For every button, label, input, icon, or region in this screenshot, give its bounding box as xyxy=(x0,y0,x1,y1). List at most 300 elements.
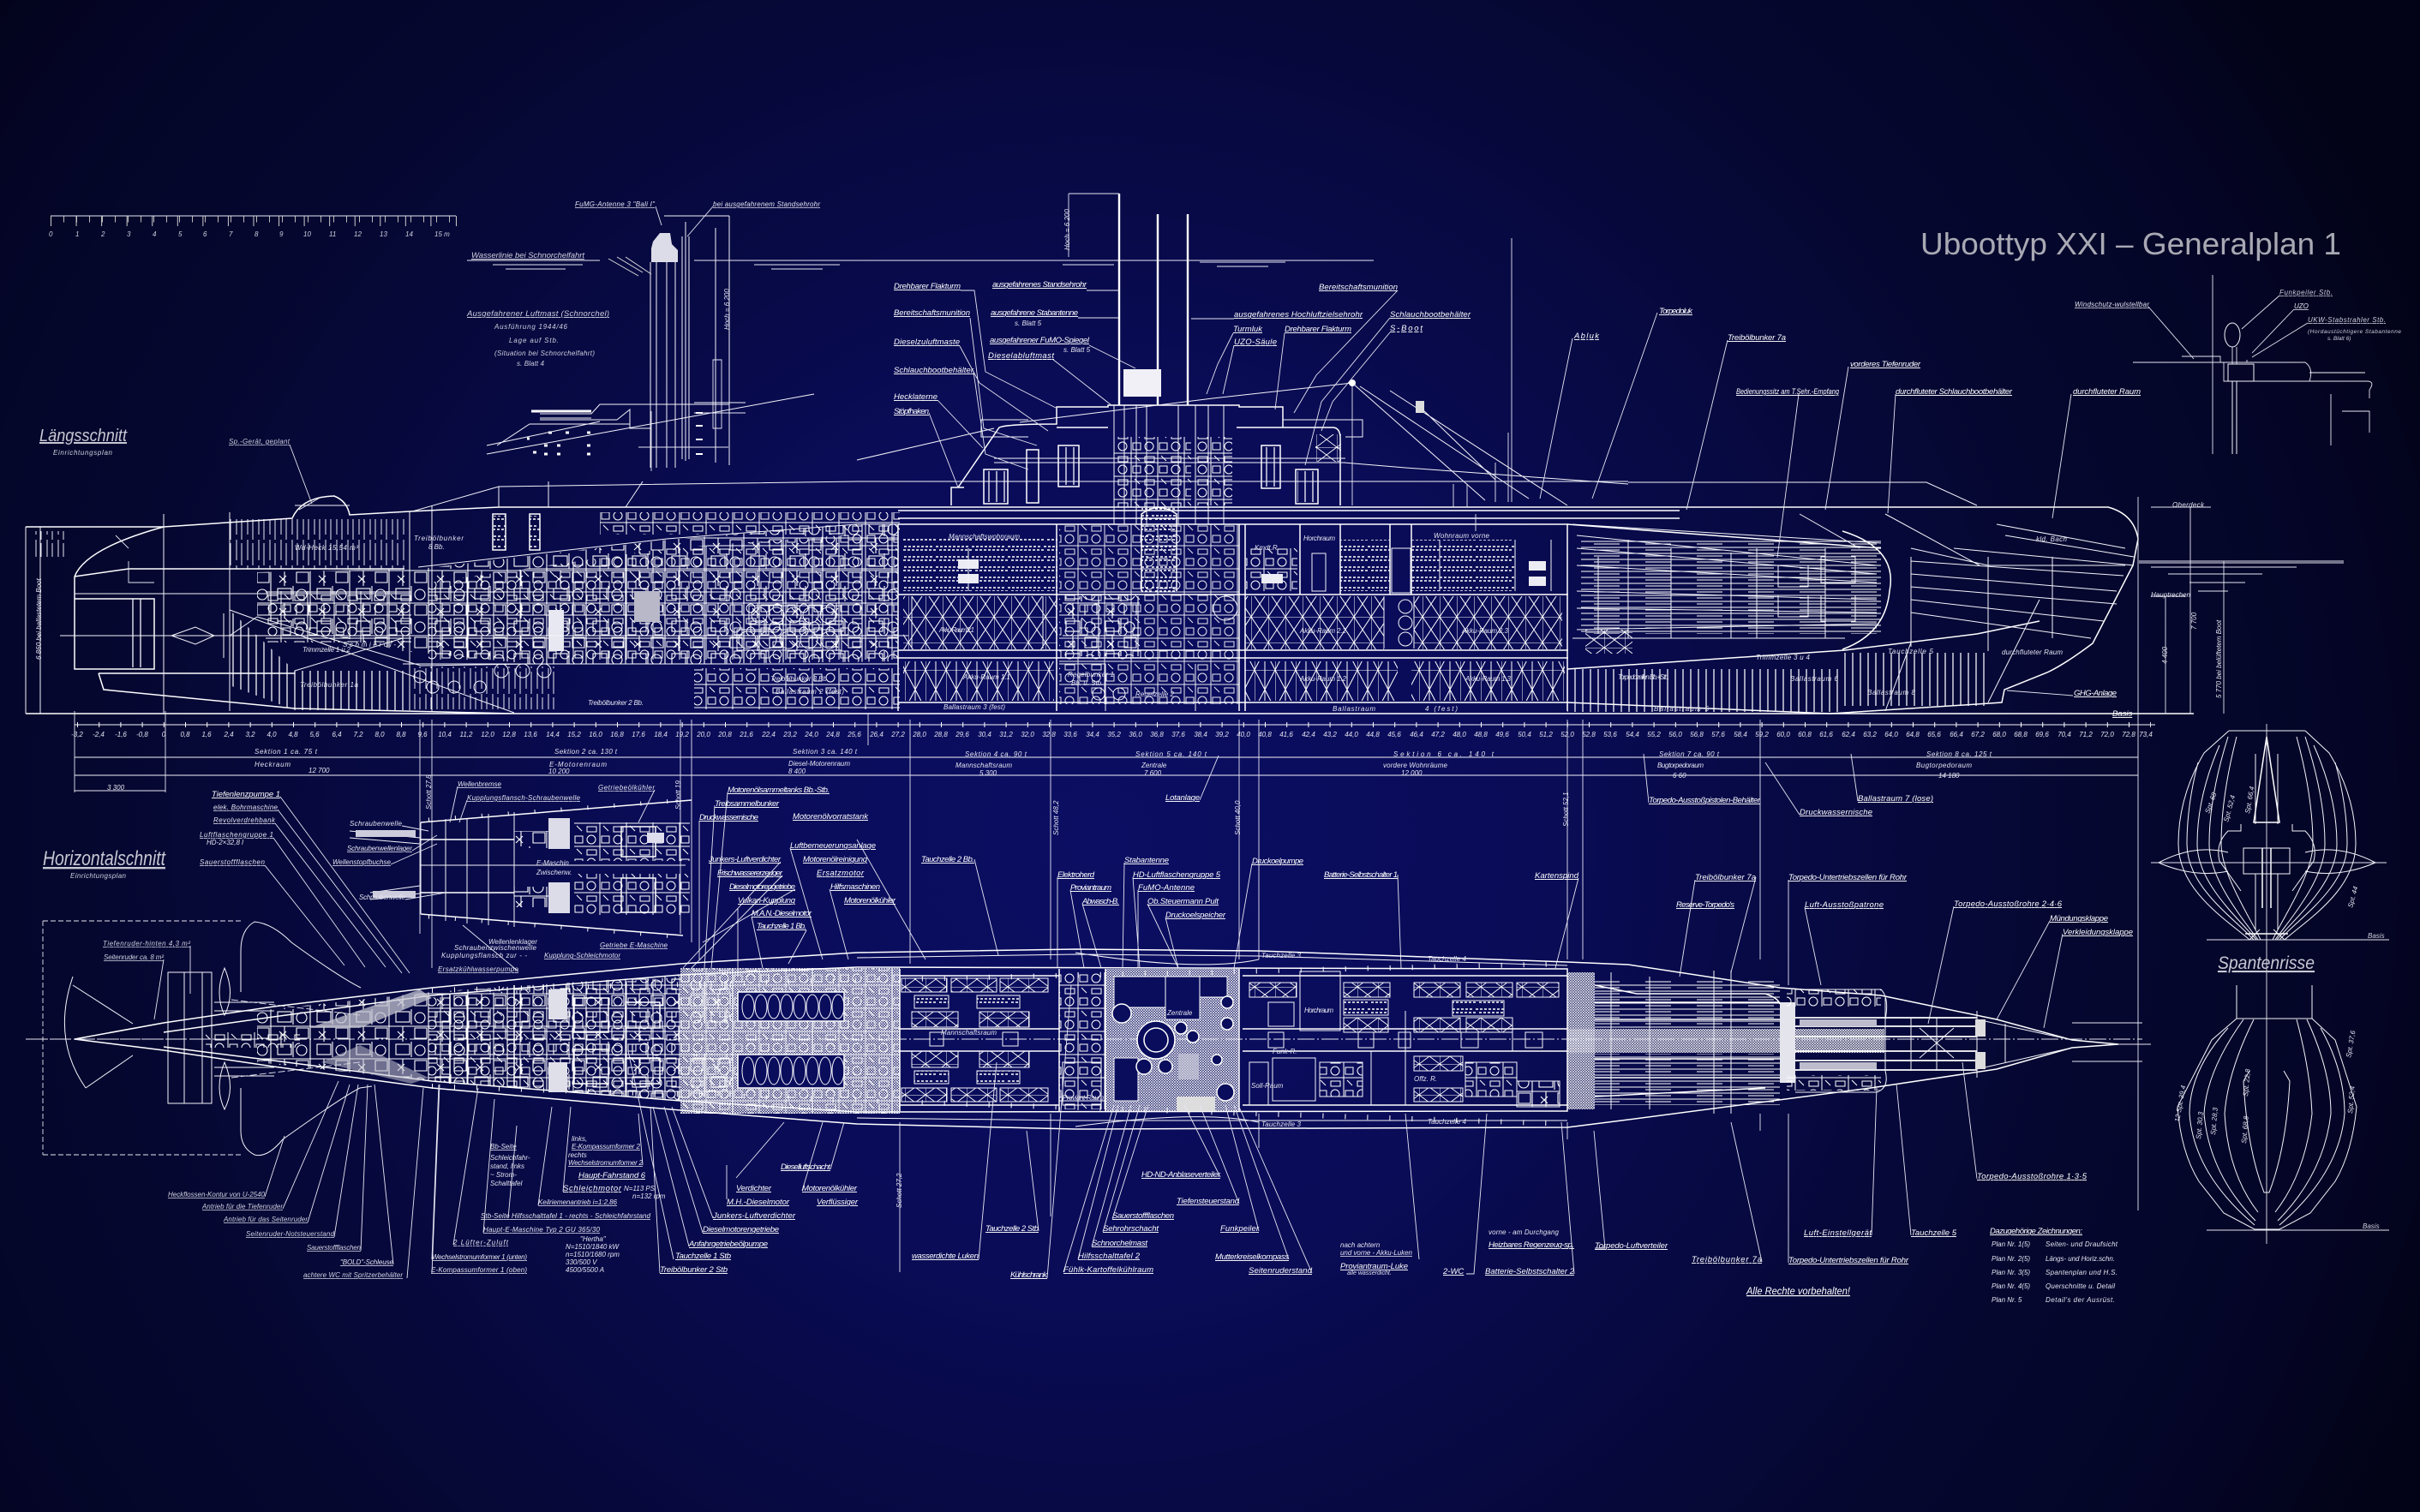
footer notes: related drawings: Plan Nr. 3(5) xyxy=(1992,1269,2030,1276)
horizontal section labels lower: N=113 PS xyxy=(624,1185,656,1192)
longitudinal leader labels: conning tower: Bereitschaftsmunition xyxy=(894,308,970,318)
torpedo room and bow: Trimmzelle 3 u 4 xyxy=(1756,654,1811,661)
horizontal section labels upper: Druckoelpumpe xyxy=(1252,857,1303,866)
room labels in longitudinal section: Regelzelle 2 xyxy=(1135,690,1175,698)
horizontal section labels lower: Schleichmotor xyxy=(563,1184,622,1193)
horizontal section labels upper: Wellenlenklager xyxy=(488,938,537,946)
footer notes: related drawings: Dazugehörige Zeichnungen: xyxy=(1990,1227,2082,1236)
horizontal section labels lower: wasserdichte Luken xyxy=(912,1252,979,1261)
frame scale and section table: 2,4 xyxy=(223,731,234,738)
frame scale and section table: 68,8 xyxy=(2014,731,2028,738)
horizontal section labels lower: Kühlschrank xyxy=(1010,1270,1048,1280)
room labels in longitudinal section: Ballastraum xyxy=(1333,705,1375,713)
frame scale and section table: 7 600 xyxy=(1144,769,1162,777)
frame scale and section table: Sektion 8 ca. 125 t xyxy=(1926,750,1992,758)
horizontal section labels lower: Bb-Seite xyxy=(490,1143,517,1150)
horizontal section labels upper: Tauchzelle 2 Bb. xyxy=(921,855,974,864)
scale bar: 15 m xyxy=(434,230,450,238)
horizontal section: hull outline xyxy=(26,949,2142,1129)
longitudinal leader labels: conning tower xyxy=(229,200,2141,696)
frame scale and section table: 44,0 xyxy=(1345,731,1358,738)
hull outline: Ballastraum 2 (fest) xyxy=(776,688,844,696)
frame scale and section table: 3 300 xyxy=(107,784,125,792)
room labels in longitudinal section: Ballastraum 3 (fest) xyxy=(943,703,1005,711)
frame scale and section table: Bugtorpedoraum xyxy=(1657,762,1704,769)
horizontal section labels upper: Sauerstoffflaschen xyxy=(200,858,266,866)
horizontal section: crew rooms: Tauchzelle 3 xyxy=(1261,952,1302,959)
frame scale and section table: 47,2 xyxy=(1431,731,1445,738)
horizontal section labels lower: Antrieb für die Tiefenruder xyxy=(201,1203,283,1210)
horizontal section labels upper: Ersatzkühlwasserpumpe xyxy=(438,965,519,973)
horizontal section labels lower: Sauerstoffflaschen xyxy=(1112,1211,1174,1221)
frame section drawing: lower xyxy=(2173,985,2389,1230)
frame scale and section table: 69,6 xyxy=(2035,731,2049,738)
frame scale and section table: 54,4 xyxy=(1626,731,1639,738)
frame scale and section table: -3,2 xyxy=(71,731,83,738)
horizontal section labels upper: Torpedo-Ausstoßrohre 2·4·6 xyxy=(1954,899,2063,909)
bow dimensions: 4 400 xyxy=(2161,646,2169,664)
frame scale and section table: 51,2 xyxy=(1539,731,1553,738)
horizontal section labels upper: Getriebe E-Maschine xyxy=(600,941,668,949)
longitudinal leader labels: conning tower: Drehbarer Flakturm xyxy=(1285,325,1351,334)
snorkel detail xyxy=(467,216,1374,471)
frame scale and section table: 72,8 xyxy=(2122,731,2135,738)
horizontal section labels lower: Luft-Einstellgerät xyxy=(1804,1228,1872,1238)
torpedo room and bow: Ballastraum 6 xyxy=(1790,675,1839,683)
room labels in longitudinal section: Mannschaftswohnraum xyxy=(949,533,1020,541)
frame scale and section table: 15,2 xyxy=(567,731,581,738)
longitudinal leader labels: conning tower: S-Boot xyxy=(1390,324,1423,333)
horizontal section: crew rooms: Proviant-Raum xyxy=(1063,1094,1104,1102)
horizontal section labels lower: rechts xyxy=(568,1151,587,1159)
torpedo room and bow: Ballastraum 8 xyxy=(1867,689,1916,696)
frame scale and section table: Schott 27,8 xyxy=(425,774,433,810)
horizontal section labels lower: Stb-Seite Hilfsschalttafel 1 - rechts - Schleichfahrstand xyxy=(481,1212,651,1220)
frame scale and section table: 32,8 xyxy=(1042,731,1056,738)
horizontal section labels upper: Tiefenruder-hinten 4,3 m² xyxy=(103,940,190,947)
frame scale and section table: Sektion 2 ca. 130 t xyxy=(554,748,618,756)
horizontal section labels lower: Heizbares Regenzeug-sp. xyxy=(1489,1240,1574,1250)
frame scale and section table: 3,2 xyxy=(245,731,255,738)
horizontal section labels upper: elek. Bohrmaschine xyxy=(213,804,279,811)
frame scale and section table: 16,8 xyxy=(610,731,624,738)
frame scale and section table: 67,2 xyxy=(1971,731,1985,738)
horizontal section labels lower: Antrieb für das Seitenruder xyxy=(223,1216,308,1223)
horizontal section labels upper: Schraubenzwischenwelle xyxy=(454,944,537,952)
frame scale and section table: 16,0 xyxy=(589,731,602,738)
hull outline: Treibölbunker 2 Bb. xyxy=(588,699,644,707)
frame scale and section table: Heckraum xyxy=(255,761,291,768)
horizontal section labels upper: HD-Luftflaschengruppe 5 xyxy=(1133,870,1221,880)
frame section drawing: upper: Spt. 68 xyxy=(2203,791,2219,815)
frame scale and section table: 42,4 xyxy=(1302,731,1315,738)
frame scale and section table: -1,6 xyxy=(115,731,127,738)
horizontal section labels lower xyxy=(168,985,2088,1280)
top-right detail view: UKW-Stabstrahler Stb. xyxy=(2308,316,2386,324)
footer notes: related drawings: Querschnitte u. Detail xyxy=(2046,1282,2115,1290)
horizontal section labels upper: E-Maschin xyxy=(536,859,569,867)
horizontal section labels lower: n=1510/1680 rpm xyxy=(566,1251,620,1258)
frame scale and section table: 40,0 xyxy=(1237,731,1250,738)
frame scale and section table: Sektion 3 ca. 140 t xyxy=(793,748,858,756)
frame section drawing: lower: Spt. 52,4 xyxy=(2346,1085,2357,1114)
top-right detail view: Funkpeiler Stb. xyxy=(2279,289,2333,296)
horizontal section labels lower: M.H.-Dieselmotor xyxy=(727,1198,790,1207)
horizontal section: crew rooms: Funk-R. xyxy=(1273,1048,1297,1055)
horizontal section labels lower: Sauerstoffflaschen xyxy=(307,1244,362,1252)
horizontal section labels upper: Seitenruder ca. 8 m² xyxy=(104,953,164,961)
frame scale and section table: 24,8 xyxy=(825,731,840,738)
horizontal section labels lower: Schleichfahr- xyxy=(490,1154,530,1162)
horizontal section labels lower: "Hertha" xyxy=(580,1235,607,1243)
frame scale and section table: -2,4 xyxy=(93,731,105,738)
horizontal section labels lower: Hilfsschalttafel 2 xyxy=(1078,1252,1141,1261)
copyright note: Alle Rechte vorbehalten! xyxy=(1746,1285,1851,1297)
frame scale and section table: 48,8 xyxy=(1474,731,1488,738)
horizontal section labels lower: E-Kompassumformer 1 (oben) xyxy=(431,1266,527,1274)
frame scale and section table: 1,6 xyxy=(201,731,212,738)
heading: Spantenrisse: Spantenrisse xyxy=(2218,953,2315,973)
scale bar: 14 xyxy=(405,230,413,238)
horizontal section: torpedo room and bow xyxy=(1567,971,2151,1114)
longitudinal leader labels: conning tower: Wasserlinie bei Schnorchelfahrt xyxy=(471,251,584,260)
frame scale and section table: 43,2 xyxy=(1323,731,1337,738)
horizontal section labels upper: Ob.Steuermann Pult xyxy=(1147,897,1219,906)
frame scale and section table: 66,4 xyxy=(1950,731,1963,738)
horizontal section labels upper: Tiefenlenzpumpe 1 xyxy=(212,790,280,799)
horizontal section labels lower: Sehrohrschacht xyxy=(1103,1224,1159,1234)
scale bar: 4 xyxy=(153,230,157,238)
frame scale and section table: 27,2 xyxy=(890,731,905,738)
hull outline: Wd-Heck 15,54 m³ xyxy=(295,544,358,552)
frame section drawing: lower: Spt. 30,3 xyxy=(2195,1111,2205,1139)
footer notes: related drawings: Plan Nr. 4(5) xyxy=(1992,1282,2030,1290)
scale bar: 11 xyxy=(329,230,336,238)
frame scale and section table: 28,0 xyxy=(912,731,926,738)
horizontal section labels lower: Haupt-Fahrstand 6 xyxy=(578,1171,646,1180)
horizontal section labels upper: Zwischenw. xyxy=(536,869,572,876)
frame scale and section table: 38,4 xyxy=(1194,731,1207,738)
longitudinal leader labels: conning tower: ausgefahrener FuMO-Spiegel xyxy=(990,336,1090,345)
frame section drawing: lower: 12 Spt. 39,4 xyxy=(2173,1085,2188,1122)
frame scale and section table: Sektion 6 ca. 140 t xyxy=(1393,750,1495,758)
longitudinal leader labels: conning tower: Dieselzuluftmaste xyxy=(894,338,960,347)
torpedo room and bow: Torpedozellen Bb.+Stb. xyxy=(1618,673,1669,681)
frame scale and section table: Zentrale xyxy=(1141,762,1167,769)
horizontal section labels lower: Motorenölkühler xyxy=(802,1184,858,1193)
frame scale and section table: 0 xyxy=(162,731,166,738)
footer notes: related drawings: Plan Nr. 1(5) xyxy=(1992,1240,2030,1248)
frame scale and section table: 0,8 xyxy=(180,731,190,738)
frame section drawing: upper: Spt. 66,4 xyxy=(2243,786,2256,814)
room labels in longitudinal section: Akku-Raum 1.3 xyxy=(1465,675,1512,683)
horizontal section labels lower: N=1510/1840 kW xyxy=(566,1243,620,1251)
frame scale and section table: Diesel-Motorenraum xyxy=(788,760,850,768)
horizontal section labels upper: Revolverdrehbank xyxy=(213,816,276,824)
horizontal section labels lower: Schnorchelmast xyxy=(1092,1239,1147,1248)
bow dimensions: 5 770 bei belüftetem Boot xyxy=(2215,619,2223,698)
frame scale and section table: 26,4 xyxy=(869,731,884,738)
longitudinal leader labels: conning tower: durchfluteter Schlauchbootbehälter xyxy=(1896,387,2013,397)
longitudinal leader labels: conning tower: UZO-Säule xyxy=(1234,338,1277,347)
horizontal section: diesel room xyxy=(680,968,900,1114)
longitudinal leader labels: conning tower: Hoch = 6 200 xyxy=(1063,209,1071,250)
frame section drawing: lower: Spt. 68,8 xyxy=(2240,1115,2250,1144)
frame scale and section table: Bugtorpedoraum xyxy=(1916,762,1972,769)
room labels in longitudinal section: 4 (fest) xyxy=(1425,705,1458,713)
horizontal section labels lower: Verdichter xyxy=(736,1184,772,1193)
frame scale and section table: 71,2 xyxy=(2079,731,2093,738)
scale bar: 12 xyxy=(354,230,362,238)
longitudinal leader labels: conning tower: ausgefahrenes Hochluftzielsehrohr xyxy=(1234,310,1363,320)
frame scale and section table: 19,2 xyxy=(675,731,689,738)
frame scale and section table: 70,4 xyxy=(2058,731,2071,738)
scale bar: 13 xyxy=(380,230,387,238)
horizontal section labels upper: Stabantenne xyxy=(1124,856,1169,865)
horizontal section labels upper xyxy=(103,754,2133,1028)
frame scale and section table: 37,6 xyxy=(1171,731,1185,738)
horizontal section labels upper: Schraubenwelle xyxy=(350,820,403,828)
horizontal section labels lower: 2-WC xyxy=(1442,1267,1464,1276)
top-right detail view xyxy=(2075,275,2401,454)
horizontal section labels lower: Treibölbunker 2 Stb xyxy=(660,1265,728,1275)
scale bar: 8 xyxy=(255,230,259,238)
frame scale and section table: Schott 19 xyxy=(674,780,682,810)
horizontal section labels upper: Motorenölsammeltanks Bb.-Stb. xyxy=(728,786,830,795)
horizontal section labels upper: Mündungsklappe xyxy=(2050,914,2108,923)
bow dimensions: 7 700 xyxy=(2190,612,2198,630)
frame scale and section table: Sektion 5 ca. 140 t xyxy=(1135,750,1207,758)
room labels in longitudinal section: Akku-Raum 1.1 xyxy=(962,673,1010,681)
horizontal section labels lower: Keilriemenantrieb i=1:2,86 xyxy=(538,1198,618,1206)
frame scale and section table: 39,2 xyxy=(1215,731,1229,738)
bow dimensions: Hauptrechen xyxy=(2151,591,2191,599)
horizontal section labels upper: Kartenspind xyxy=(1535,871,1579,881)
horizontal section labels upper: Torpedo-Ausstoßpistolen-Behälter xyxy=(1649,796,1761,805)
horizontal section labels lower: nach achtern xyxy=(1340,1241,1381,1249)
heading: Längsschnitt xyxy=(39,427,128,457)
room labels in longitudinal section: Akku-Raum 1.2 xyxy=(1299,675,1347,683)
frame scale and section table: 59,2 xyxy=(1755,731,1769,738)
horizontal section labels lower: Torpedo-Ausstoßrohre 1·3·5 xyxy=(1977,1172,2088,1181)
frame section drawing: upper: Spt. 52,4 xyxy=(2222,794,2237,823)
horizontal section labels lower: Dieselluftschacht xyxy=(781,1162,830,1172)
horizontal section: crew rooms: Tauchzelle 3 xyxy=(1261,1121,1302,1128)
conning tower and masts xyxy=(412,194,1977,593)
frame scale and section table: 35,2 xyxy=(1107,731,1121,738)
frame scale and section table: 34,4 xyxy=(1086,731,1099,738)
frame scale and section table: 11,2 xyxy=(460,731,473,738)
horizontal section labels lower: Haupt-E-Maschine Typ 2 GU 365/30 xyxy=(483,1226,601,1234)
horizontal section labels lower: 2 Lüfter-Zuluft xyxy=(452,1239,509,1246)
frame scale and section table: 50,4 xyxy=(1518,731,1531,738)
frame scale and section table: 63,2 xyxy=(1863,731,1877,738)
scale bar: 3 xyxy=(127,230,131,238)
horizontal section labels upper: Druckwassernische xyxy=(699,813,758,822)
top-right detail view: UZO xyxy=(2294,302,2309,310)
frame section drawing: lower: Spt. 37,6 xyxy=(2345,1030,2357,1058)
horizontal section labels upper: Kupplungsflansch zur - - xyxy=(441,952,527,959)
frame scale and section table: 45,6 xyxy=(1387,731,1401,738)
frame scale and section table: 12,8 xyxy=(502,731,516,738)
horizontal section labels upper: Luft-Ausstoßpatrone xyxy=(1805,900,1884,910)
horizontal section labels lower: Wechselstromumformer 2 xyxy=(568,1159,644,1167)
frame scale and section table: 31,2 xyxy=(999,731,1013,738)
horizontal section labels lower: stand, links xyxy=(490,1162,524,1170)
horizontal section labels lower: Wechselstromumformer 1 (unten) xyxy=(432,1253,527,1261)
footer notes: related drawings: Längs- und Horiz.schn. xyxy=(2046,1255,2115,1263)
horizontal section: crew rooms: Horchraum xyxy=(1304,1007,1333,1014)
longitudinal leader labels: conning tower: ausgefahrenes Standsehrohr xyxy=(992,280,1087,290)
frame scale and section table: 53,6 xyxy=(1603,731,1617,738)
heading: Horizontalschnitt: Einrichtungsplan xyxy=(70,872,127,880)
frame scale and section table: 5,6 xyxy=(309,731,320,738)
horizontal section: stern fins and rudder xyxy=(43,921,372,1156)
horizontal section labels lower: Treibölbunker 7a xyxy=(1692,1255,1762,1264)
horizontal section labels upper: Schraubenwellenlager xyxy=(347,845,412,852)
longitudinal leader labels: conning tower: ausgefahrene Stabantenne xyxy=(991,308,1078,318)
frame scale and section table: 8,8 xyxy=(396,731,406,738)
frame scale and section table: 64,0 xyxy=(1884,731,1898,738)
frame scale and section table: 33,6 xyxy=(1063,731,1077,738)
horizontal section labels lower: links, xyxy=(572,1135,587,1143)
longitudinal leader labels: conning tower: Sp.-Gerät, geplant xyxy=(229,438,291,445)
torpedo room and bow: durchfluteter Raum xyxy=(2002,648,2063,656)
frame scale and section table: E-Motorenraum xyxy=(549,761,607,768)
longitudinal leader labels: conning tower: Lage auf Stb. xyxy=(509,337,559,344)
scale bar: 10 xyxy=(303,230,311,238)
frame scale and section table: 23,2 xyxy=(782,731,797,738)
horizontal section labels lower: Tiefensteuerstand xyxy=(1177,1197,1240,1206)
longitudinal leader labels: conning tower: Stöpfhaken xyxy=(894,407,929,416)
E-motor detail drawing xyxy=(350,800,692,937)
frame scale and section table: 32,0 xyxy=(1021,731,1034,738)
frame scale and section table: 13,6 xyxy=(524,731,537,738)
horizontal section labels upper: Verkleidungsklappe xyxy=(2063,928,2133,937)
horizontal section labels upper: Getriebeölkühler xyxy=(598,784,655,792)
horizontal section labels lower: Tauchzelle 5 xyxy=(1911,1228,1957,1238)
horizontal section labels lower: E-Kompassumformer 2 xyxy=(572,1143,641,1150)
longitudinal leader labels: conning tower: Turmluk xyxy=(1233,325,1263,334)
room labels in longitudinal section xyxy=(938,532,1710,713)
horizontal section: crew rooms: Soll-Raum xyxy=(1251,1082,1284,1090)
frame scale and section table: 56,8 xyxy=(1690,731,1704,738)
longitudinal section: machinery fills xyxy=(230,512,900,710)
horizontal section labels lower: Seitenruderstand xyxy=(1249,1266,1313,1276)
longitudinal leader labels: conning tower: Drehbarer Flakturm xyxy=(894,282,961,291)
room labels in longitudinal section: Akku-Raum 2.3 xyxy=(1461,627,1509,635)
longitudinal leader labels: conning tower: Abluk xyxy=(1573,332,1600,341)
frame scale and section table: 12 000 xyxy=(1401,769,1423,777)
footer notes: related drawings: Detail's der Ausrüst. xyxy=(2046,1296,2115,1304)
frame scale and section table: 12 700 xyxy=(308,767,330,774)
frame scale and section table: 52,0 xyxy=(1560,731,1574,738)
frame scale and section table: 9,6 xyxy=(417,731,428,738)
room labels in longitudinal section: Ballastraum 5 xyxy=(1654,705,1710,713)
frame scale and section table: 30,4 xyxy=(978,731,991,738)
room labels in longitudinal section: Kmdt.R. xyxy=(1255,544,1279,552)
frame scale and section table: vordere Wohnräume xyxy=(1383,762,1448,769)
horizontal section labels upper: Junkers-Luftverdichter xyxy=(708,855,782,864)
frame scale and section table: 14 180 xyxy=(1938,772,1960,780)
frame scale and section table: 57,6 xyxy=(1711,731,1725,738)
room labels in longitudinal section: Bb. u. Stb. xyxy=(1071,679,1103,687)
horizontal section labels upper: Treibölbunker 7a xyxy=(1695,873,1756,882)
heading: Horizontalschnitt: Horizontalschnitt xyxy=(43,847,166,870)
horizontal section labels upper: Hilfsmaschinen xyxy=(830,882,880,892)
footer notes: related drawings: Plan Nr. 5 xyxy=(1992,1296,2022,1304)
frame section drawing: upper: Basis xyxy=(2368,932,2385,940)
heading: Horizontalschnitt xyxy=(43,847,166,880)
torpedo room and bow: kld. Bach xyxy=(2036,535,2068,543)
room labels in longitudinal section: Akku-Raum 2.2 xyxy=(1299,627,1347,635)
frame scale and section table: 10 200 xyxy=(548,768,570,775)
horizontal section labels lower: "BOLD"-Schleuse xyxy=(340,1258,394,1266)
bow dimensions xyxy=(35,497,2344,1210)
room labels in longitudinal section: Wohnraum vorne xyxy=(1434,532,1490,540)
horizontal section labels lower: ~ Strom- xyxy=(490,1171,517,1179)
frame scale and section table: 52,8 xyxy=(1582,731,1596,738)
frame scale and section table: 36,0 xyxy=(1129,731,1142,738)
frame scale and section table: 7,2 xyxy=(353,731,363,738)
bow dimensions: GHG-Anlage xyxy=(2074,689,2117,698)
frame scale and section table: 41,6 xyxy=(1279,731,1293,738)
scale bar: 6 xyxy=(203,230,207,238)
heading: Längsschnitt: Längsschnitt xyxy=(39,427,128,445)
longitudinal leader labels: conning tower: Hecklaterne xyxy=(894,392,937,402)
frame scale and section table: Sektion 1 ca. 75 t xyxy=(255,748,318,756)
frame scale and section table: 61,6 xyxy=(1819,731,1833,738)
horizontal section labels lower: HD-ND-Anblaseverteiler xyxy=(1141,1170,1221,1180)
hull outline: Trimmzelle 1 u 2 xyxy=(302,646,351,654)
frame scale and section table: Schott 48,2 xyxy=(1052,800,1060,835)
frame scale and section table: 10,4 xyxy=(438,731,452,738)
horizontal section labels lower: Heckflossen-Kontur von U-2540 xyxy=(168,1191,266,1198)
frame scale and section table: 28,8 xyxy=(933,731,948,738)
footer notes: related drawings: Spantenplan und H.S. xyxy=(2046,1269,2118,1276)
horizontal section labels upper: Luftberneuerungsanlage xyxy=(790,841,876,851)
horizontal section labels upper: Elektroherd xyxy=(1057,870,1095,880)
frame scale and section table: 21,6 xyxy=(739,731,753,738)
title: Uboottyp XXI – Generalplan 1 xyxy=(1920,226,2341,261)
horizontal section labels lower: Torpedo-Untertriebszellen für Rohr xyxy=(1788,1256,1909,1265)
horizontal section labels lower: Junkers-Luftverdichter xyxy=(712,1211,796,1221)
horizontal section labels lower: Batterie-Selbstschalter 2 xyxy=(1485,1267,1575,1276)
horizontal section labels upper: Treibsammelbunker xyxy=(715,799,780,809)
horizontal section labels upper: Schraubenwelle xyxy=(359,893,406,901)
scale bar: 1 xyxy=(75,230,79,238)
longitudinal leader labels: conning tower: Hoch = 6 200 xyxy=(723,289,731,330)
horizontal section labels upper: Batterie-Selbstschalter 1 xyxy=(1324,870,1398,880)
horizontal section: crew rooms: Tauchzelle 4 xyxy=(1428,1118,1467,1126)
horizontal section labels upper: Kupplungsflansch-Schraubenwelle xyxy=(467,794,581,802)
longitudinal leader labels: conning tower: s. Blatt 4 xyxy=(517,360,545,368)
frame scale and section table: 44,8 xyxy=(1366,731,1380,738)
scale bar: 5 xyxy=(178,230,183,238)
longitudinal leader labels: conning tower: vorderes Tiefenruder xyxy=(1850,360,1921,369)
frame scale and section table: 17,6 xyxy=(632,731,645,738)
horizontal section labels upper: M.A.N.-Dieselmotor xyxy=(752,909,812,918)
longitudinal leader labels: conning tower: FuMG-Antenne 3 "Bali I" xyxy=(575,200,656,208)
footer notes: related drawings: Plan Nr. 2(5) xyxy=(1992,1255,2030,1263)
horizontal section: stern machinery xyxy=(206,975,680,1101)
frame section drawing: lower: Basis xyxy=(2363,1222,2380,1230)
horizontal section labels upper: Torpedo-Untertriebszellen für Rohr xyxy=(1788,873,1908,882)
frame scale and section table: 6 60 xyxy=(1673,772,1686,780)
frame scale and section table: 56,0 xyxy=(1668,731,1682,738)
horizontal section labels lower: Seitenruder-Notsteuerstand xyxy=(246,1230,335,1238)
frame section drawing: upper xyxy=(2151,724,2389,1244)
